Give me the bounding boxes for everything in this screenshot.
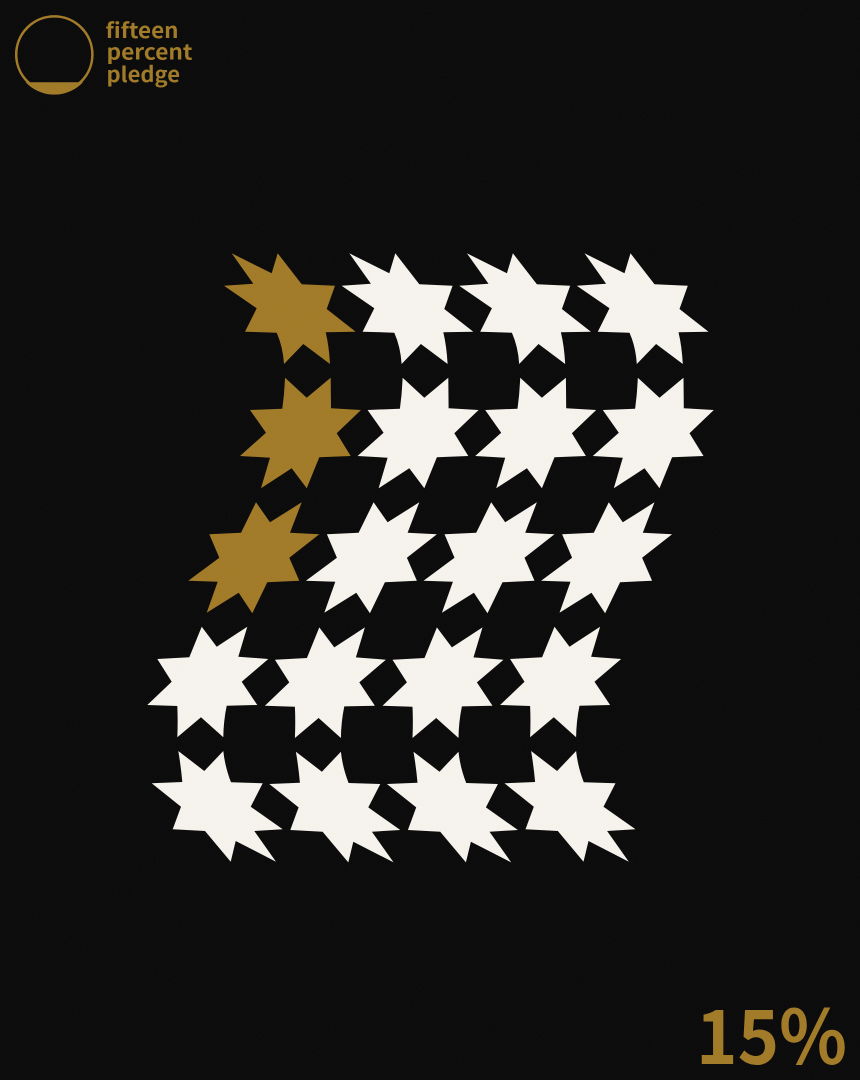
star row 2: [240, 378, 714, 488]
star row 5: [152, 751, 635, 862]
logo wordmark: fifteen: [106, 15, 178, 45]
star row 3: [188, 502, 672, 613]
star row 4: [147, 627, 621, 738]
logo wordmark: [106, 15, 193, 89]
star row 1: [224, 253, 708, 364]
logo wordmark: percent: [106, 36, 193, 66]
star grid: 20 stars, 3 gold: [147, 253, 714, 862]
logo: fifteen percent pledge: [16, 15, 193, 95]
icon: circle with filled base segment: [16, 16, 92, 95]
logo wordmark: pledge: [106, 59, 180, 89]
